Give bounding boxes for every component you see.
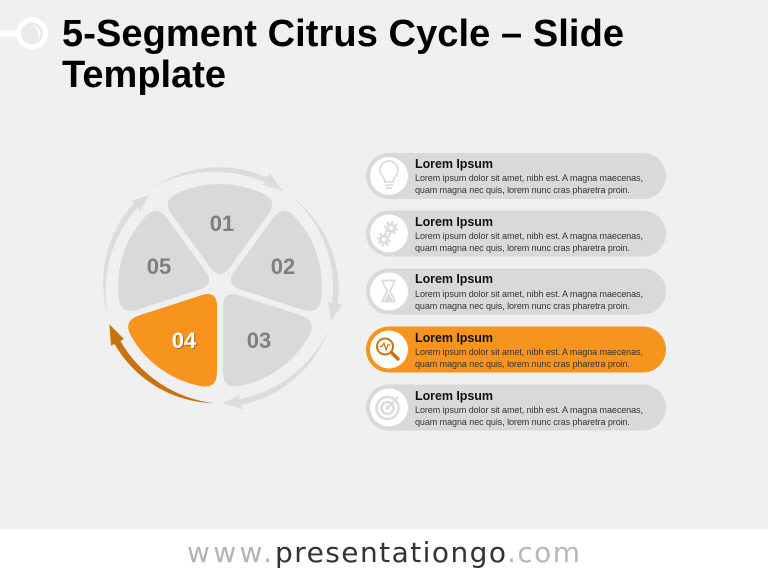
footer band <box>0 529 768 576</box>
panel: item 2: Lorem ipsum dolor sit amet, nibh est. A magna maecenas, <box>415 231 643 241</box>
panel: item 5: Lorem Ipsum <box>415 389 493 403</box>
panel: item 3 <box>366 268 666 314</box>
icon: title ring marker <box>0 20 46 47</box>
panel: item 5: Lorem ipsum dolor sit amet, nibh est. A magna maecenas, <box>415 405 643 415</box>
panel: item 2 <box>366 210 666 256</box>
arrow 1 <box>153 167 283 191</box>
panel: item 5: quam magna nec quis, lorem nunc cras pharetra proin. <box>415 417 630 427</box>
segment 01 <box>168 184 272 274</box>
citrus cycle diagram <box>103 167 342 409</box>
panel: item 4 highlighted: Lorem ipsum dolor sit amet, nibh est. A magna maecenas, <box>415 347 643 357</box>
footer website text: presentationgo <box>275 536 506 569</box>
icon: gears <box>378 222 397 246</box>
panel: item 3: Lorem Ipsum <box>415 272 493 286</box>
arrow 2 <box>292 197 342 321</box>
panel: item 2: Lorem Ipsum <box>415 215 493 229</box>
footer website text <box>187 536 580 569</box>
segment 04 highlighted <box>118 265 255 399</box>
title: 5-Segment Citrus Cycle – Slide <box>62 13 624 55</box>
arrow 3 <box>222 329 329 409</box>
number 01: 01 <box>210 211 234 236</box>
number 02: 02 <box>271 254 295 279</box>
arrow 4 highlighted <box>109 324 215 403</box>
panel: item 1 <box>366 153 666 199</box>
panel: item 1: Lorem Ipsum <box>415 157 493 171</box>
number 05: 05 <box>147 254 171 279</box>
panel: item 3: quam magna nec quis, lorem nunc cras pharetra proin. <box>415 301 630 311</box>
segment 02 <box>215 205 333 332</box>
icon: hourglass <box>381 280 396 302</box>
segment 03 <box>185 265 322 399</box>
number 04 shadow: 04 <box>173 329 198 354</box>
title <box>62 13 624 96</box>
panel: item 5 <box>366 384 666 430</box>
title: Template <box>62 54 226 96</box>
panel: item 2: quam magna nec quis, lorem nunc cras pharetra proin. <box>415 243 630 253</box>
panel: item 4 highlighted <box>366 326 666 372</box>
icon: light bulb <box>380 161 398 188</box>
panel: item 4 highlighted: quam magna nec quis, lorem nunc cras pharetra proin. <box>415 359 630 369</box>
number 03: 03 <box>247 328 271 353</box>
icon: magnifier <box>377 338 398 359</box>
arrow 5 <box>103 195 149 317</box>
footer website text: www. <box>187 536 272 569</box>
panel: item 4 highlighted: Lorem Ipsum <box>415 331 493 345</box>
footer website text: .com <box>507 536 580 569</box>
panel: item 1: quam magna nec quis, lorem nunc cras pharetra proin. <box>415 185 630 195</box>
panel: item 1: Lorem ipsum dolor sit amet, nibh est. A magna maecenas, <box>415 173 643 183</box>
icon: target <box>376 397 398 419</box>
segment 05 <box>107 205 225 332</box>
number 04: 04 <box>172 328 197 353</box>
panel: item 3: Lorem ipsum dolor sit amet, nibh est. A magna maecenas, <box>415 289 643 299</box>
